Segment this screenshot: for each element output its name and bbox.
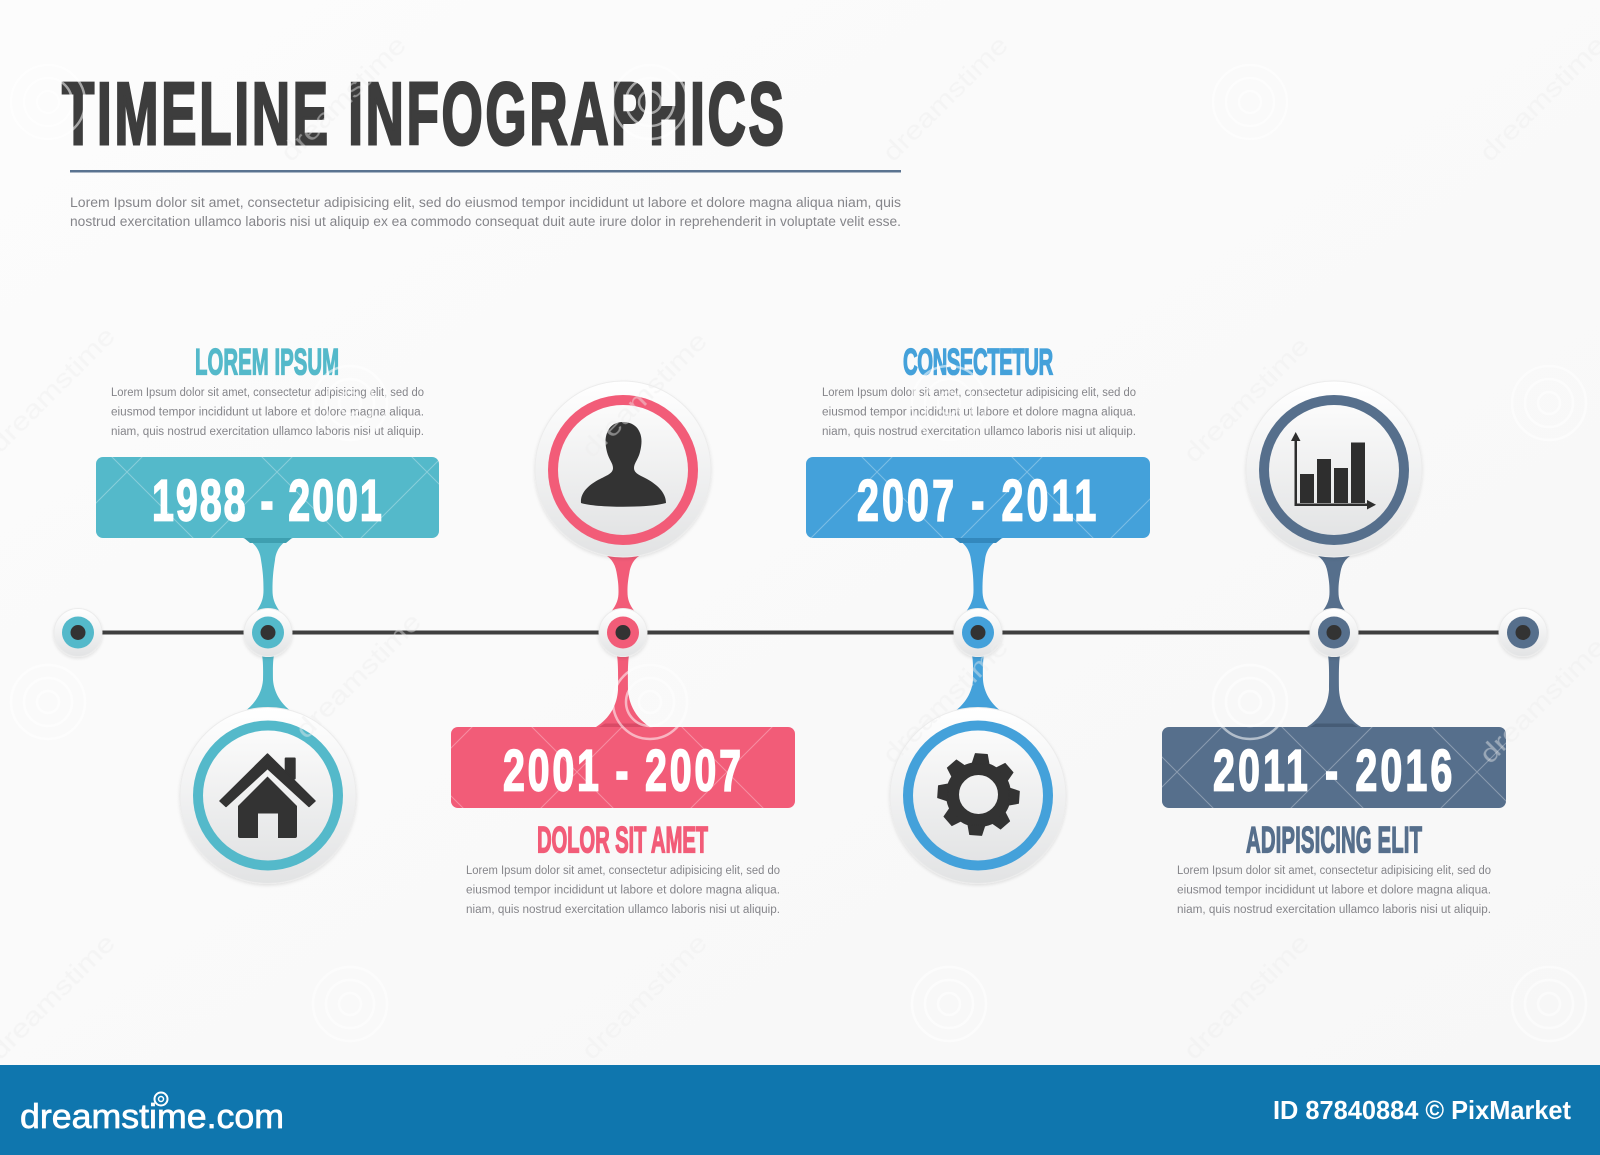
text block: Lorem Ipsum dolor sit amet, consectetur adipisicing elit, sed do [1177, 865, 1491, 877]
timeline node [244, 608, 292, 656]
date box [451, 724, 795, 808]
watermark pattern: dreamstime [876, 29, 1014, 167]
watermark pattern: dreamstime [1177, 927, 1315, 1065]
text block: eiusmod tempor incididunt ut labore et dolore magna aliqua. [111, 406, 424, 418]
panel: 2011 - 2016 [1162, 381, 1506, 916]
intro paragraph [70, 195, 901, 229]
heading: dolor sit amet: DOLOR SIT AMET [537, 820, 708, 861]
timeline node [1310, 608, 1358, 656]
text block: niam, quis nostrud exercitation ullamco laboris nisi ut aliquip. [466, 904, 780, 916]
logo: dreamstime: dreamstime.com [20, 1098, 284, 1136]
connector bottom [596, 650, 650, 727]
icon: bar chart [1246, 381, 1422, 557]
heading: consectetur: CONSECTETUR [903, 342, 1053, 383]
connector top [953, 538, 1003, 612]
connector top [601, 553, 645, 612]
timeline axis [100, 630, 1500, 634]
date box [1162, 724, 1506, 808]
date box: 2007 - 2011 [857, 468, 1096, 533]
connector bottom [1307, 650, 1361, 727]
date box: 1988 - 2001 [152, 468, 382, 533]
icon: gear [890, 708, 1066, 884]
panel: 2007 - 2011 [806, 342, 1150, 884]
watermark pattern: dreamstime [1473, 631, 1600, 769]
heading: adipisicing elit: ADIPISICING ELIT [1246, 820, 1422, 861]
text block [822, 387, 1136, 438]
intro paragraph: Lorem Ipsum dolor sit amet, consectetur adipisicing elit, sed do eiusmod tempor incididunt ut labore et dolore magna aliqua niam, quis [70, 195, 901, 210]
text block: Lorem Ipsum dolor sit amet, consectetur adipisicing elit, sed do [822, 387, 1136, 399]
watermark pattern: dreamstime [289, 606, 427, 744]
date box [96, 457, 439, 543]
start node [54, 608, 102, 656]
connector bottom [244, 650, 292, 712]
date box [806, 457, 1150, 543]
text block [466, 865, 780, 916]
connector top [1312, 553, 1356, 612]
text block: Lorem Ipsum dolor sit amet, consectetur adipisicing elit, sed do [111, 387, 424, 399]
title: TIMELINE INFOGRAPHICS [62, 65, 784, 163]
text block [1177, 865, 1491, 916]
image credit: ID 87840884 © PixMarket [1273, 1095, 1571, 1125]
watermark pattern: dreamstime [876, 631, 1014, 769]
watermark pattern: dreamstime [1177, 330, 1315, 468]
icon: house [180, 708, 356, 884]
timeline node [954, 608, 1002, 656]
end node [1499, 608, 1547, 656]
text block: niam, quis nostrud exercitation ullamco laboris nisi ut aliquip. [111, 426, 424, 438]
connector top [243, 538, 293, 612]
watermark pattern: dreamstime [575, 325, 713, 463]
intro paragraph: nostrud exercitation ullamco laboris nisi ut aliquip ex ea commodo consequat duit aute irure dolor in reprehenderit in voluptate velit esse. [70, 214, 901, 229]
text block: Lorem Ipsum dolor sit amet, consectetur adipisicing elit, sed do [466, 865, 780, 877]
text block [111, 387, 424, 438]
text block: niam, quis nostrud exercitation ullamco laboris nisi ut aliquip. [1177, 904, 1491, 916]
watermark pattern: dreamstime [274, 29, 412, 167]
watermark pattern: dreamstime [1473, 29, 1600, 167]
connector bottom [954, 650, 1002, 712]
panel: 1988 - 2001 [96, 342, 439, 884]
footer bar [0, 1065, 1600, 1155]
text block: eiusmod tempor incididunt ut labore et dolore magna aliqua. [466, 884, 780, 896]
date box: 2001 - 2007 [503, 738, 741, 803]
text block: eiusmod tempor incididunt ut labore et dolore magna aliqua. [1177, 884, 1491, 896]
panel: 2001 - 2007 [451, 381, 795, 916]
title rule [70, 170, 901, 172]
date box: 2011 - 2016 [1213, 738, 1452, 803]
timeline node [599, 608, 647, 656]
text block: niam, quis nostrud exercitation ullamco laboris nisi ut aliquip. [822, 426, 1136, 438]
text block: eiusmod tempor incididunt ut labore et dolore magna aliqua. [822, 406, 1136, 418]
watermark pattern: dreamstime [575, 927, 713, 1065]
icon: person [535, 381, 711, 557]
heading: lorem ipsum: LOREM IPSUM [195, 342, 339, 383]
